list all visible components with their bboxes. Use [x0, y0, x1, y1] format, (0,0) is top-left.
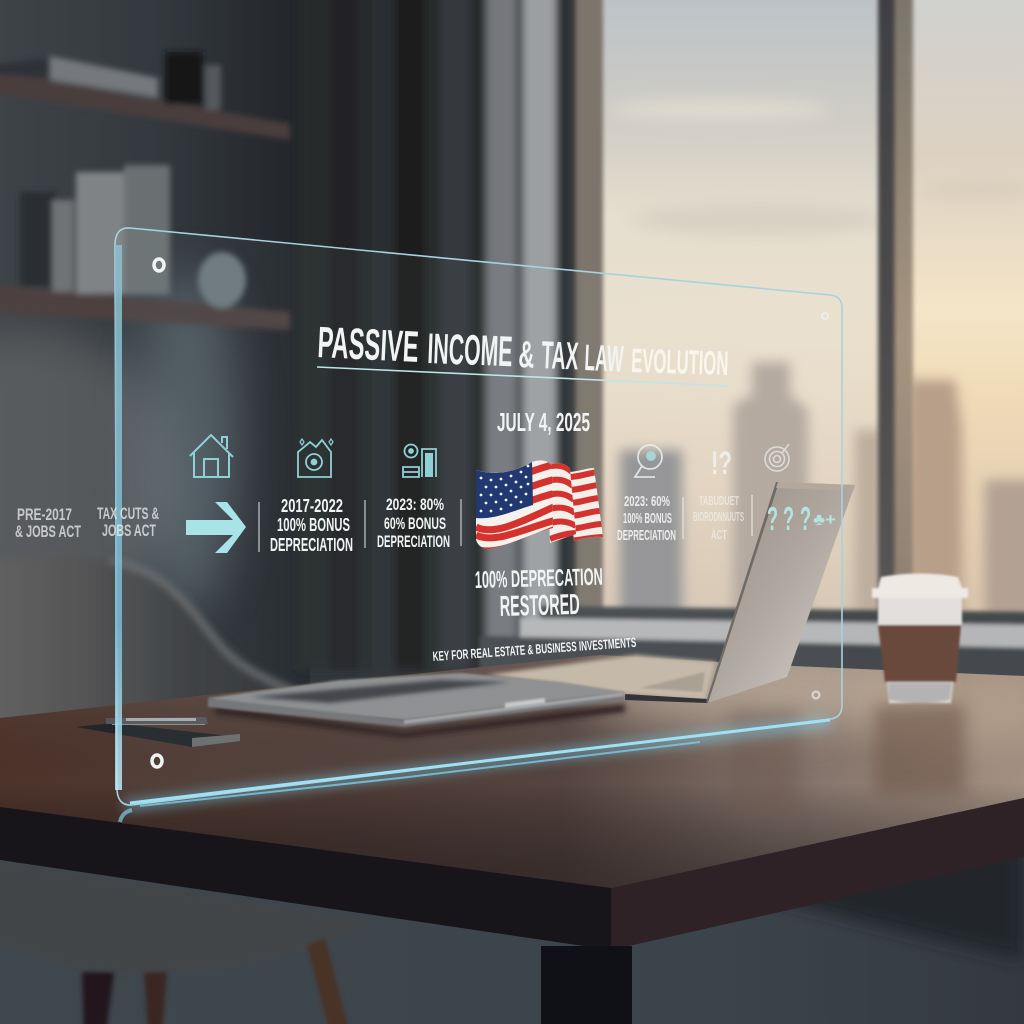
timeline: pre-2017: PRE-2017 [17, 505, 72, 524]
timeline: pre-2017: & JOBS ACT [15, 522, 81, 541]
floor [0, 830, 1024, 1024]
icon: target [765, 444, 789, 471]
unknown future marks: ? [767, 500, 778, 537]
icon: exclamation and question marks: !? [711, 445, 732, 481]
icon: coin and building [403, 444, 436, 477]
title [317, 318, 729, 386]
glass mount screws [152, 259, 828, 767]
text: BIORODNNUUTS [693, 509, 744, 524]
cup reflection [875, 705, 965, 795]
timeline: 2017-2022 [270, 496, 353, 555]
shadow [215, 704, 625, 738]
flag rear fold [570, 468, 603, 541]
title: & [518, 334, 535, 377]
timeline: 2017-2022: DEPRECIATION [270, 535, 353, 555]
timeline: budget act: ACT [711, 527, 727, 542]
timeline: 2023 60% [617, 493, 676, 544]
icon: house [190, 435, 233, 477]
unknown future marks: ? [800, 500, 811, 537]
glass panel [115, 228, 842, 822]
second laptop screen [706, 482, 855, 703]
key message: 100% depreciation restored [474, 564, 603, 623]
divider [460, 499, 462, 546]
window frames [568, 0, 913, 630]
timeline: 2023: DEPRECIATION [377, 532, 450, 551]
timeline: 2023: 2023: 80% [386, 495, 444, 514]
arrow [186, 502, 246, 553]
bottom edge [130, 720, 830, 803]
divider [364, 500, 366, 548]
laptop reflection [730, 710, 800, 820]
curtain [298, 0, 573, 670]
divider [751, 495, 753, 536]
caption: key for investments: KEY FOR REAL ESTATE & BUSINESS INVESTMENTS [432, 635, 637, 664]
glow along bottom edge [125, 722, 830, 806]
timeline: 2017-2022: 2017-2022 [281, 496, 343, 516]
pen and notebook [76, 717, 240, 747]
timeline: budget act [693, 493, 744, 542]
title underline [317, 367, 729, 386]
key message: 100% depreciation restored: 100% DEPRECATION [474, 564, 603, 594]
unknown future marks [767, 500, 836, 537]
glass blue tint [140, 270, 240, 610]
timeline: 2017-2022: 100% BONUS [277, 515, 350, 535]
title: LAW [584, 337, 624, 380]
table front left [0, 807, 611, 950]
icon: location pin [635, 445, 662, 477]
left edge [115, 245, 122, 790]
timeline: tax cuts and jobs act [97, 504, 159, 540]
unknown future marks: ♣+ [813, 510, 836, 529]
table highlights [586, 656, 1024, 800]
timeline: 2023 60%: 100% BONUS [623, 510, 672, 527]
text: EVOLUTION [631, 342, 729, 383]
title: PASSIVE [317, 318, 420, 372]
laptop on desk [208, 655, 716, 738]
chair seat and legs [0, 860, 372, 1024]
second laptop base [486, 655, 716, 700]
icon: American flag [476, 460, 603, 550]
desk chair back [0, 557, 295, 730]
wall light patch [0, 330, 180, 630]
clouds [610, 100, 1024, 236]
timeline: 2023 60%: 2023: 60% [624, 493, 670, 510]
wall [0, 0, 310, 720]
table front right [611, 798, 1024, 950]
divider [682, 497, 684, 539]
date: JULY 4, 2025 [497, 407, 590, 437]
window sky [590, 0, 890, 620]
table leg [541, 946, 632, 1024]
timeline: budget act: TABUDUET [699, 493, 739, 508]
coffee cup [872, 574, 968, 703]
table [0, 650, 1024, 1024]
glass outline [115, 228, 842, 805]
city skyline [620, 362, 1024, 620]
timeline: tax cuts and jobs act: JOBS ACT [102, 521, 156, 540]
key message: 100% depreciation restored: RESTORED [499, 589, 580, 623]
base [208, 673, 624, 720]
timeline: pre-2017 [15, 505, 81, 541]
window sill [480, 606, 1024, 690]
unknown future marks: ? [783, 500, 794, 537]
divider [258, 502, 260, 552]
window sky right [905, 0, 1024, 620]
icon: house with coin [298, 439, 333, 477]
title: INCOME [427, 325, 513, 376]
flag middle fold [550, 463, 576, 543]
shelves with books [0, 52, 290, 330]
timeline: 2023 60%: DEPRECIATION [617, 527, 676, 544]
timeline: 2023: 60% BONUS [384, 514, 446, 533]
timeline: tax cuts and jobs act: TAX CUTS & [97, 504, 159, 523]
timeline: 2023 [377, 495, 450, 551]
flag front section [476, 460, 553, 550]
title: TAX [541, 334, 579, 379]
